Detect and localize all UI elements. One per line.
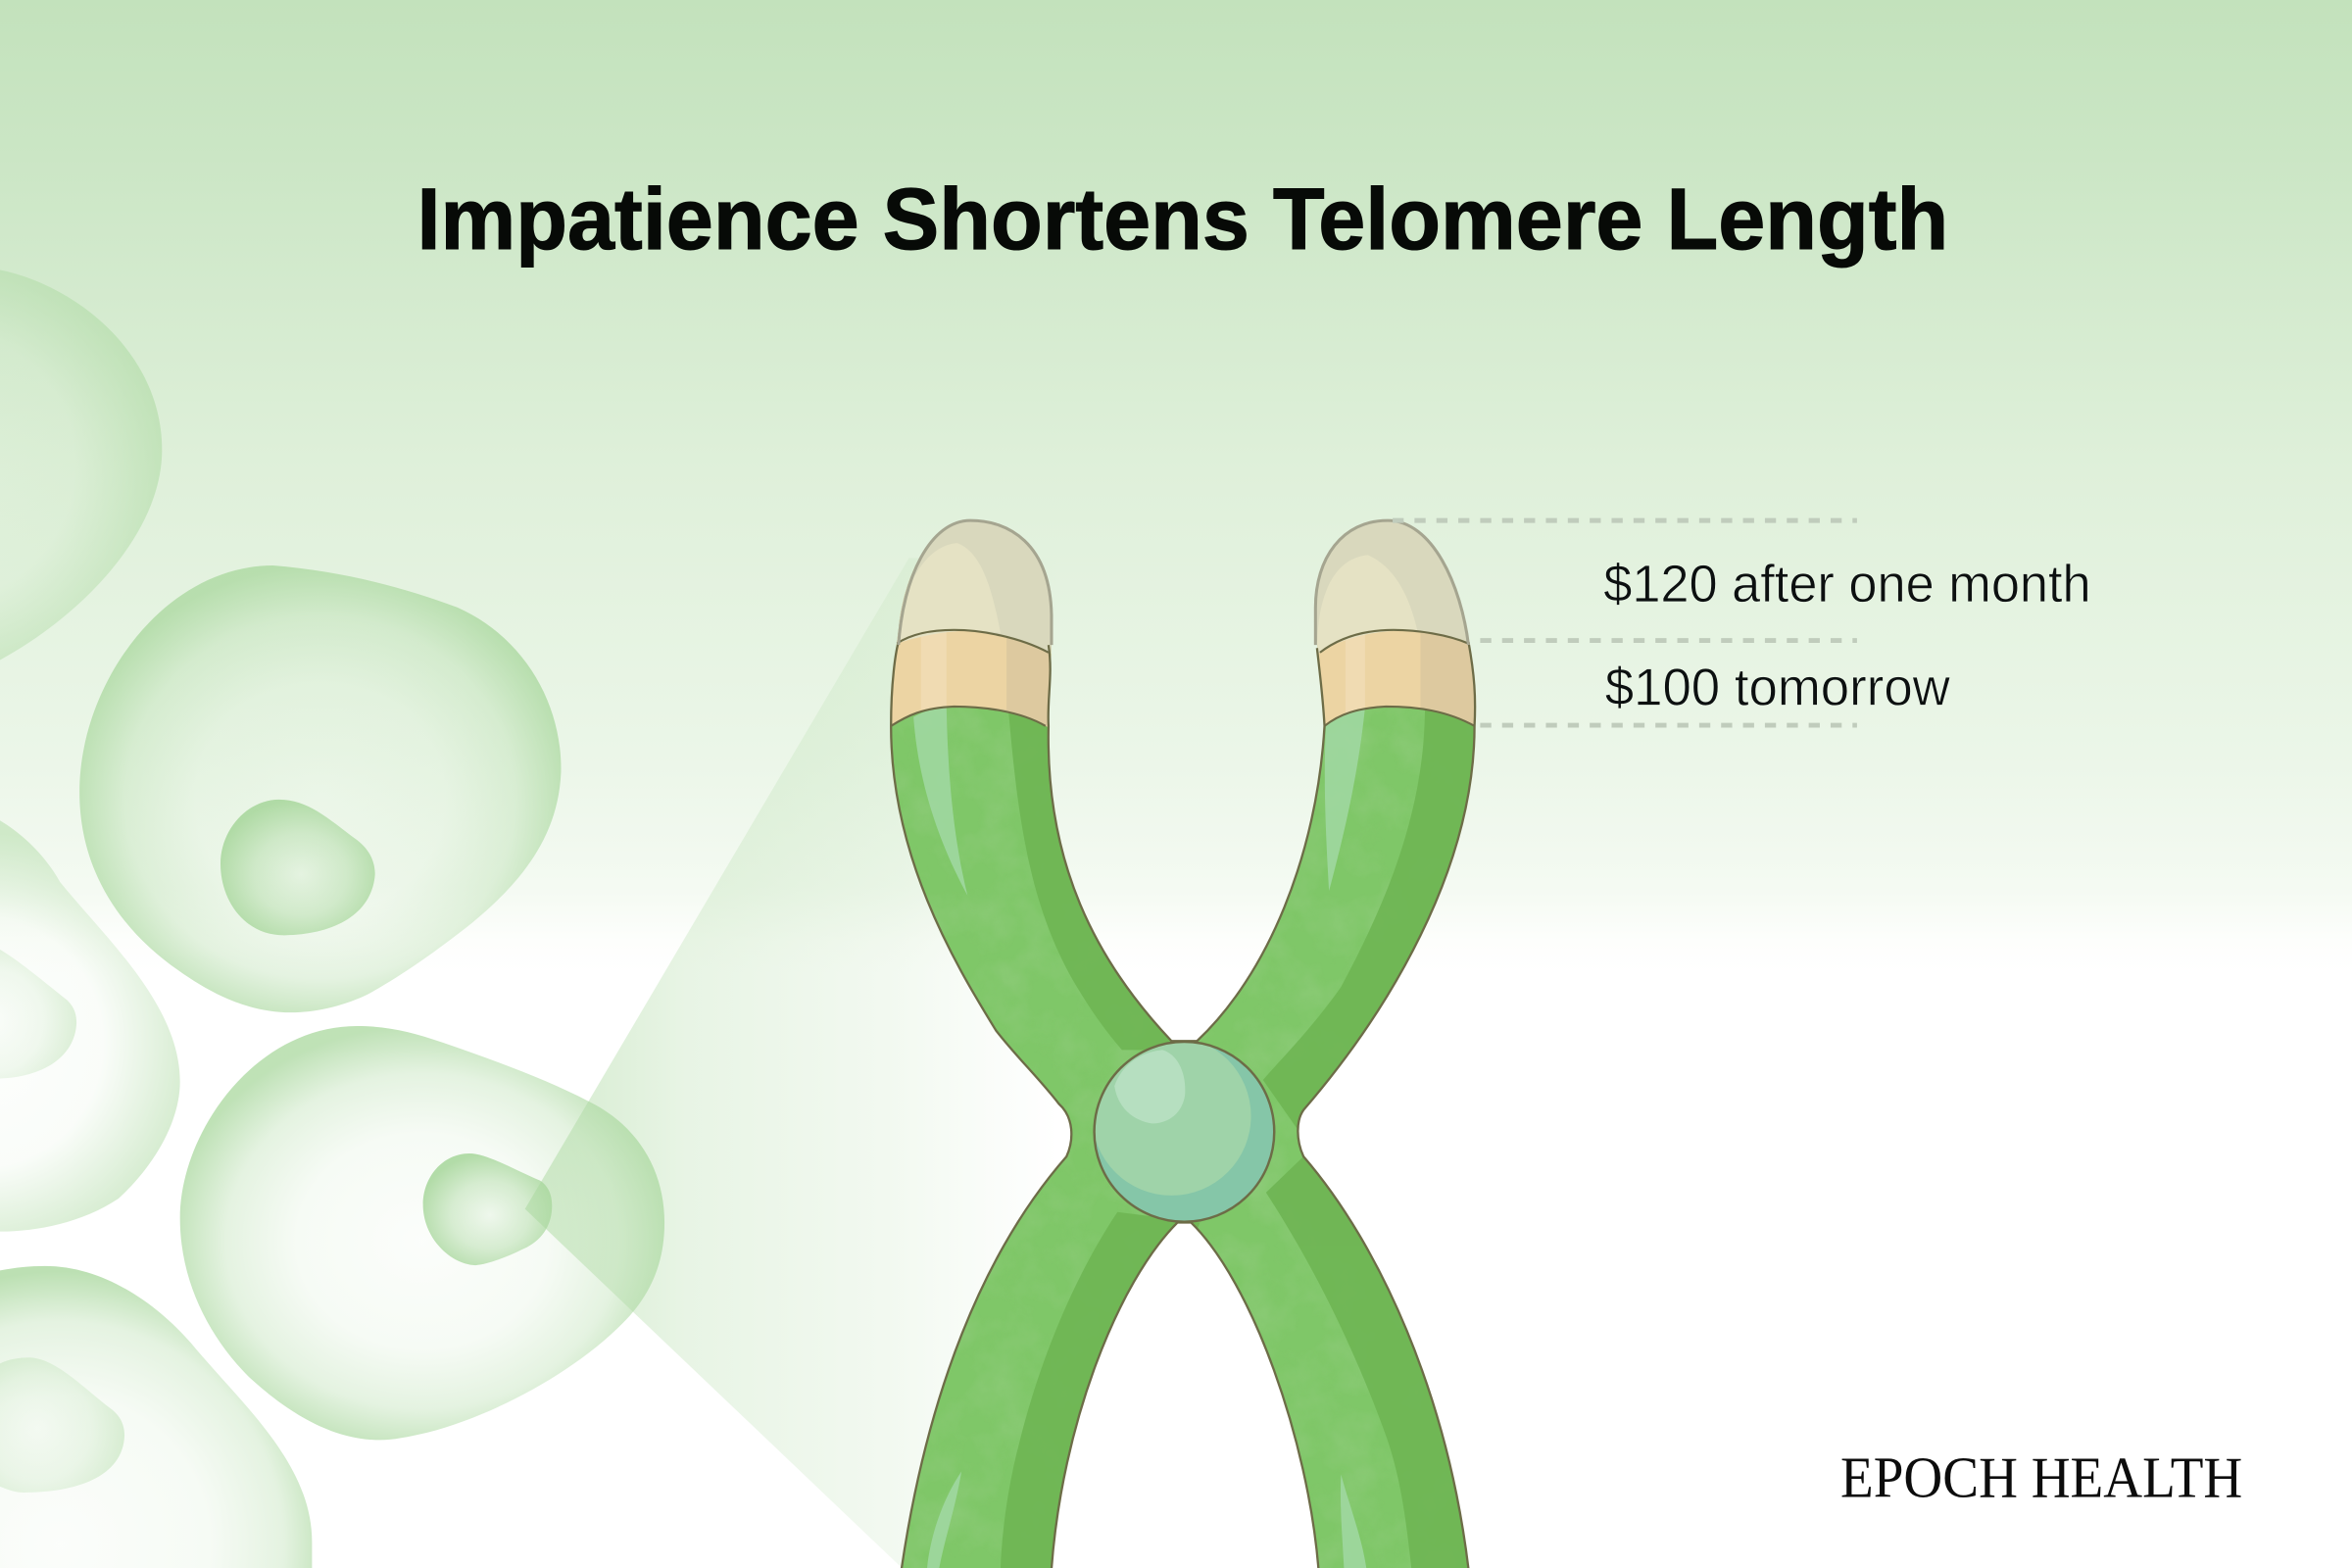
cell: upper with nucleus (79, 565, 561, 1012)
chromosome outline (891, 642, 1475, 1568)
arm highlights (913, 708, 1366, 1568)
cell: centre with nucleus (180, 1026, 664, 1440)
cell: bottom left with nucleus (0, 1266, 312, 1568)
darker shading stripes (1001, 705, 1500, 1568)
label: $120 after one month: $120 after one month (1603, 556, 2091, 613)
cap outline (899, 520, 1468, 653)
cell: left middle with nucleus (0, 820, 180, 1232)
chromosome fill layers (877, 510, 1500, 1568)
zoom beam from nucleus to chromosome (525, 558, 1057, 1568)
label: $100 tomorrow: $100 tomorrow (1605, 659, 1950, 716)
telomere cap: $120 (897, 521, 1466, 654)
chromosome illustration (877, 510, 1500, 1568)
logo: Epoch Health: EPOCH HEALTH (1840, 1446, 2242, 1510)
centromere (1092, 1037, 1274, 1222)
cell: top left (0, 270, 162, 660)
telomere band: $100 (892, 569, 1474, 727)
band outlines (891, 630, 1475, 726)
title: Impatience Shortens Telomere Length (417, 171, 1948, 268)
dotted measurement lines (1393, 520, 1857, 725)
cells illustration (0, 270, 664, 1568)
